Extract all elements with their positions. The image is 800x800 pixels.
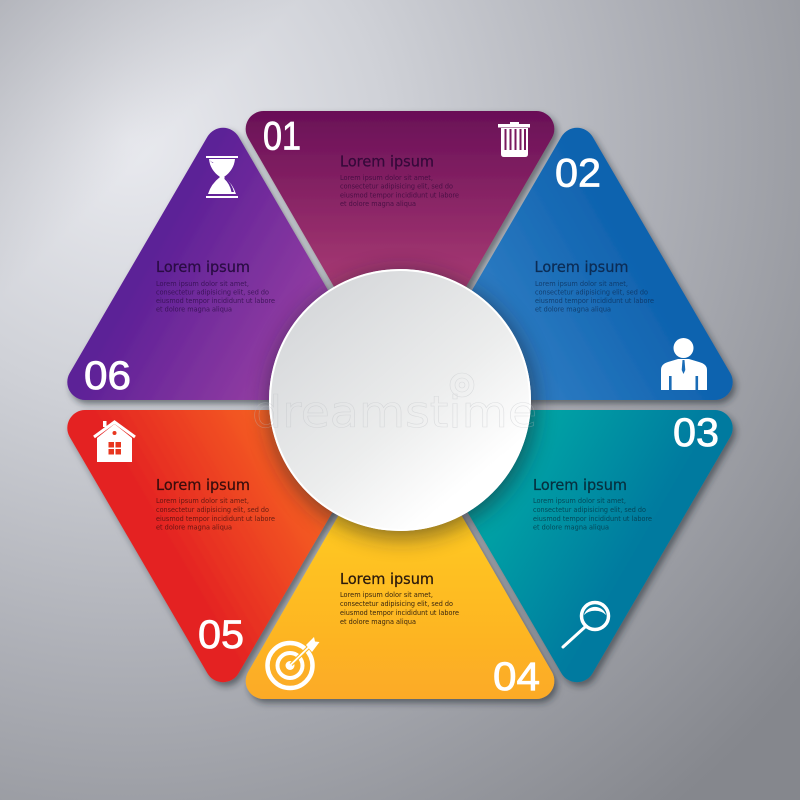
body text 01: et dolore magna aliqua — [340, 200, 416, 208]
body text 02: et dolore magna aliqua — [535, 306, 611, 314]
body text 05: Lorem ipsum dolor sit amet, — [156, 497, 249, 505]
body text 05: eiusmod tempor incididunt ut labore — [156, 515, 275, 523]
body text 03: eiusmod tempor incididunt ut labore — [533, 515, 652, 523]
body text 06: eiusmod tempor incididunt ut labore — [156, 297, 275, 305]
icon: hourglass — [206, 156, 238, 198]
heading 04: Lorem ipsum — [340, 570, 434, 588]
body text 02: consectetur adipisicing elit, sed do — [535, 288, 648, 296]
heading 02: Lorem ipsum — [534, 258, 628, 276]
body text 01 — [340, 174, 459, 208]
number 05: 05 — [198, 613, 244, 657]
panel 04: yellow — [246, 409, 554, 699]
body text 04: Lorem ipsum dolor sit amet, — [340, 591, 433, 599]
icon: target with arrow — [268, 637, 320, 688]
body text 06 — [156, 280, 275, 314]
central circle — [268, 269, 536, 539]
icon: magnifying glass — [563, 602, 608, 647]
body text 03: et dolore magna aliqua — [533, 524, 609, 532]
body text 01: eiusmod tempor incididunt ut labore — [340, 192, 459, 200]
number 04: 04 — [493, 655, 540, 699]
body text 02: eiusmod tempor incididunt ut labore — [535, 297, 654, 305]
body text 01: consectetur adipisicing elit, sed do — [340, 183, 453, 191]
body text 01: Lorem ipsum dolor sit amet, — [340, 174, 433, 182]
body text 06: et dolore magna aliqua — [156, 306, 232, 314]
icon: trash can — [498, 122, 530, 157]
body text 02 — [535, 280, 654, 314]
body text 02: Lorem ipsum dolor sit amet, — [535, 280, 628, 288]
body text 05 — [156, 497, 275, 532]
number 03: 03 — [673, 411, 719, 455]
body text 05: consectetur adipisicing elit, sed do — [156, 506, 269, 514]
heading 06: Lorem ipsum — [156, 258, 250, 276]
heading 03: Lorem ipsum — [533, 476, 627, 494]
body text 06: Lorem ipsum dolor sit amet, — [156, 280, 249, 288]
body text 05: et dolore magna aliqua — [156, 524, 232, 532]
watermark: dreamstime — [252, 387, 537, 438]
panel 01: maroon — [246, 111, 554, 401]
panel 02: blue — [408, 128, 733, 400]
number 01: 01 — [263, 114, 301, 158]
panel 06: purple — [67, 128, 392, 400]
icon: house — [94, 421, 135, 462]
body text 04: eiusmod tempor incididunt ut labore — [340, 609, 459, 617]
body text 04 — [340, 591, 459, 626]
number 02: 02 — [555, 152, 601, 196]
body text 04: consectetur adipisicing elit, sed do — [340, 600, 453, 608]
body text 03 — [533, 497, 652, 532]
body text 03: consectetur adipisicing elit, sed do — [533, 506, 646, 514]
body text 04: et dolore magna aliqua — [340, 618, 416, 626]
heading 05: Lorem ipsum — [156, 476, 250, 494]
body text 06: consectetur adipisicing elit, sed do — [156, 288, 269, 296]
number 06: 06 — [84, 354, 131, 398]
panel 05: red-orange — [67, 410, 392, 682]
body text 03: Lorem ipsum dolor sit amet, — [533, 497, 626, 505]
panel 03: teal — [408, 410, 733, 682]
heading 01: Lorem ipsum — [340, 152, 434, 170]
icon: businessman — [661, 338, 707, 390]
